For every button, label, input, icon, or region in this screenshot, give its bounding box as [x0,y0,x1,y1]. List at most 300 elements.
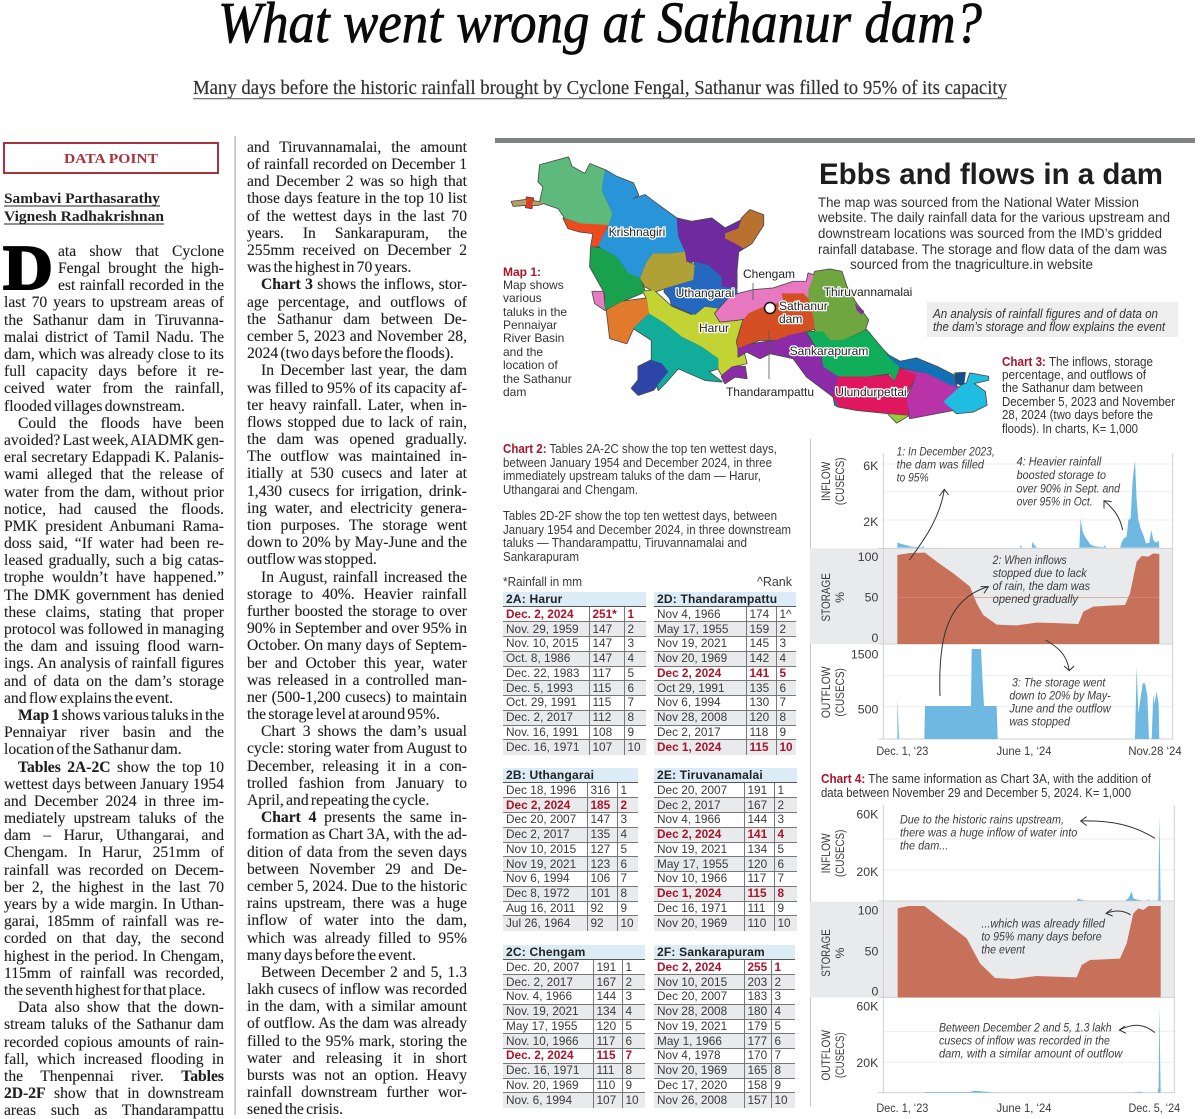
table 2E: Tiruvanamalai: Dec 2, 2024 [657,827,721,841]
chart 3 arrows [909,489,1123,696]
chart 2 caption: taluks — Thandarampattu, Tiruvannamalai and [503,536,747,550]
article column 2: years. In Sankarapuram, the [247,225,467,242]
table 2E: Tiruvanamalai: Nov 19, 2021 [657,842,727,856]
table 2E: Tiruvanamalai: 134 [748,842,767,856]
table 2A: Harur: 147 [592,636,612,650]
article column 2: the dam was opened gradually. [247,431,467,448]
table 2A: Harur [503,592,646,755]
chart 3 axis labels: 2K [863,515,879,529]
article column 2: October. On many days of Septem- [247,637,467,654]
chart 4 axis labels: (CUSECS) [833,1032,847,1078]
chart 3 caption: the Sathanur dam between [1002,381,1143,395]
table 2C: Chengam: 134 [596,1004,616,1018]
table 2F: Sankarapuram: 255 [748,960,767,974]
map 1 caption: Pennaiyar [503,318,557,332]
table 2E: Tiruvanamalai: May 17, 1955 [657,857,728,871]
authors byline: Sambavi Parthasarathy [4,191,161,207]
table 2F: Sankarapuram: Nov 20, 1969 [657,1063,727,1077]
table 2D: Thandarampattu: 135 [750,681,769,695]
table 2A: Harur: Dec. 22, 1983 [506,666,579,680]
panel top rule [495,138,1195,143]
article column 2: and Tiruvannamalai, the amount [247,139,467,156]
chart 2 caption: Uthangarai and Chengam. [503,483,638,497]
chart 4 axis labels: INFLOW [819,833,833,873]
table 2A: Harur: Dec. 2, 2017 [506,710,573,724]
article column 2: ber and October this year, water [247,655,467,672]
table 2E: Tiruvanamalai: 167 [748,798,767,812]
table 2C: Chengam: 2 [626,975,632,989]
chart 4 axis labels [819,807,1180,1115]
chart 3 caption: 28, 2024 (two days before the [1002,408,1153,422]
article column 2: trolled fashion from January to [247,775,467,792]
table 2E: Tiruvanamalai: 2 [778,798,784,812]
table 2D: Thandarampattu: 141 [750,666,769,680]
article column 2: Chart 3 shows the inflows, stor- [261,276,467,293]
table 2E: Tiruvanamalai: 8 [778,886,784,900]
table 2E: Tiruvanamalai: Nov 4, 1966 [657,812,721,826]
table 2B: Uthangarai: 4 [620,827,627,841]
article column 1: highest in the period. In Chengam, [4,948,224,965]
table 2D: Thandarampattu: 130 [750,696,769,709]
map labels: Chengam [743,267,795,281]
chart 4 annotations: the event [981,944,1026,957]
table 2A: Harur: Oct. 8, 1986 [506,651,570,665]
article column 1: Pennaiyar river basin and the [4,724,224,741]
article column 1: wettest days between January 1954 [4,776,224,793]
chart 4 annotations: the dam... [900,839,948,852]
table 2D: Thandarampattu: 8 [780,710,786,724]
data point label [4,143,218,173]
table 2C: Chengam: Nov. 6, 1994 [506,1093,572,1107]
table 2B: Uthangarai: 1 [620,783,627,797]
table 2F: Sankarapuram: 183 [748,990,767,1003]
table 2E: Tiruvanamalai: Dec 2, 2017 [657,798,721,812]
article column 2: formation as Chart 3A, with the ad- [247,826,467,843]
table 2B: Uthangarai: 3 [620,812,627,826]
chart 3 annotations: boosted storage to [1017,469,1106,482]
chart 4 axis labels: Dec. 1, ‘23 [876,1101,928,1115]
table 2F: Sankarapuram: Dec 2, 2024 [657,960,721,974]
callout: analysis summary: the dam’s storage and flow explains the event [933,320,1165,334]
table 2C: Chengam: 107 [596,1093,616,1107]
intro text [817,195,1170,272]
chart 2 caption: ^Rank [757,575,793,589]
table 2C: Chengam: 120 [596,1019,616,1033]
map 1 caption: taluks in the [503,305,567,319]
table 2F: Sankarapuram: Dec 20, 2007 [657,990,727,1003]
article column 2: April, and repeating the cycle. [247,792,429,809]
article column 1: doss said, “If water had been re- [4,535,224,552]
article column 1: years by a wide margin. In Uthan- [4,896,224,913]
table 2F: Sankarapuram: 10 [774,1093,788,1107]
map: Pennaiyar river basin taluks [512,157,988,423]
table 2F: Sankarapuram: 1 [774,960,781,974]
table 2D: Thandarampattu: 3 [780,636,786,650]
table 2D: Thandarampattu: 10 [780,740,793,754]
article column 1: location of the Sathanur dam. [4,741,182,758]
table 2F: Sankarapuram: Nov 28, 2008 [657,1004,727,1018]
article column 1: ceived water from the rainfall, [4,380,224,397]
chart 3 axis labels: 1500 [851,647,878,661]
table 2E: Tiruvanamalai: 120 [748,857,767,871]
chart 3 axis labels: % [833,592,847,603]
table 2C: Chengam: 8 [626,1063,632,1077]
table 2B: Uthangarai: Nov 10, 2015 [506,842,576,856]
article column 2: 90% in September and over 95% in [247,620,467,637]
chart 4 annotations: Due to the historic rains upstream, [900,813,1064,826]
chart 3 axis labels: Dec. 1, ‘23 [876,744,928,758]
table 2B: Uthangarai: 6 [620,857,627,871]
table 2B: Uthangarai: 147 [590,812,610,826]
article column 1: mediately upstream taluks of the [4,810,224,827]
table 2E: Tiruvanamalai: 1 [778,783,784,797]
table 2C: Chengam: Dec. 2, 2017 [506,975,573,989]
map 1 caption: location of [503,358,558,372]
map leader lines [753,283,769,379]
chart 4 annotations: cusecs of inflow was recorded in the [939,1034,1110,1047]
intro text: website. The daily rainfall data for the various upstream and [817,210,1170,225]
table 2F: Sankarapuram: May 1, 1966 [657,1034,722,1048]
chart 3 axis labels: 6K [863,459,879,473]
article column 1: Data also show that the down- [18,999,224,1016]
article column 1: ber 2, the highest in the last 70 [4,879,224,896]
chart 2 caption: Chart 2: Tables 2A-2C show the top ten wettest days, [503,442,777,456]
chart 3 axis labels: INFLOW [819,461,833,501]
chart 3 annotations: 1: In December 2023, [897,446,995,459]
map 1 caption: Map shows [503,278,564,292]
article column 2: cember 5, 2024. Due to the historic [247,878,467,895]
table 2E: Tiruvanamalai: Dec 16, 1971 [657,901,727,915]
table 2C: Chengam: Nov. 19, 2021 [506,1004,579,1018]
article column 1: malai district of Tamil Nadu. The [4,329,224,346]
article column 2: rainfall downstream further wor- [247,1084,467,1101]
article column 2: ter heavy rainfall. Later, when in- [247,397,467,414]
article column 2: ing water, and electricity genera- [247,500,467,517]
chart 3 caption [1002,355,1175,436]
article column 1: garai, 185mm of rainfall was re- [4,913,224,930]
map labels: Krishnagiri [609,225,665,239]
column rule [234,136,236,1115]
chart 4 annotations [900,813,1124,1060]
table 2D: Thandarampattu: Dec 2, 2017 [657,725,721,739]
chart 3 axis labels: STORAGE [819,573,833,621]
chart 3: inflow, storage, outflow [810,439,1182,772]
article column 1: last 70 years to upstream areas of [4,294,224,311]
chart 3 caption: floods). In charts, K= 1,000 [1002,422,1138,436]
article column 2: In December last year, the dam [261,362,467,379]
icon: Sathanur dam marker [764,302,776,314]
chart 4 axis labels: 60K [856,807,879,821]
table 2A: Harur: Dec. 16, 1971 [506,740,579,754]
map labels: Harur [699,321,729,335]
table 2C: Chengam: May 17, 1955 [506,1019,577,1033]
chart 3 annotations: of rain, the dam was [993,580,1090,593]
table 2F: Sankarapuram: 9 [774,1078,781,1092]
article column 1: PMK president Anbumani Rama- [4,518,224,535]
article column 1: and flow explains the event. [4,690,173,707]
article column 1: Chengam. In Harur, 251mm of [4,844,224,861]
map 1 caption: various [503,291,542,305]
table 2D: Thandarampattu: 4 [780,651,786,665]
table 2D: Thandarampattu: Nov 19, 2021 [657,636,727,650]
authors byline [4,191,164,225]
table 2F: Sankarapuram: Nov 4, 1978 [657,1048,721,1062]
table 2A: Harur: Nov. 10, 2015 [506,636,579,650]
article column 1: rainfall was recorded on Decem- [4,862,224,879]
chart 3 axis labels [819,457,1182,758]
table 2F: Sankarapuram: 177 [748,1034,767,1048]
table 2B: Uthangarai: 8 [620,886,627,900]
table 2A: Harur: 6 [628,681,634,695]
table 2B: Uthangarai: 9 [620,901,627,915]
table 2D: Thandarampattu: Nov 6, 1994 [657,696,721,709]
chart 3 annotations: 2: When inflows [992,554,1067,567]
table 2B: Uthangarai: Dec 8, 1972 [506,886,570,900]
article column 1: Fengal brought the high- [58,260,224,277]
article column 1: wami alleged that the release of [4,466,224,483]
chart 4 axis labels: 50 [865,944,878,958]
table 2F: Sankarapuram: Dec 17, 2020 [657,1078,727,1092]
article column 1: ings. An analysis of rainfall figures [4,655,224,672]
table 2A: Harur: 147 [592,622,612,636]
chart 3 annotations [897,446,1120,729]
chart 4 arrows [1081,817,1155,1033]
chart 3 annotations: over 95% in Oct. [1017,495,1093,508]
article column 2: of the wettest days in the last 70 [247,208,467,225]
article column 1: avoided? Last week, AIADMK gen- [4,432,224,449]
table 2C: Chengam: 4 [626,1004,632,1018]
table 2A: Harur: 2 [628,622,634,636]
table 2D: Thandarampattu: 174 [750,607,769,621]
table 2E: Tiruvanamalai: 7 [778,872,784,885]
chart 3 axis labels: (CUSECS) [833,457,847,505]
chart 3 axis labels: June 1, ‘24 [996,744,1052,758]
table 2F: Sankarapuram: 2F: Sankarapuram [657,945,765,959]
table 2B: Uthangarai: 185 [590,798,610,812]
table 2B: Uthangarai: 123 [590,857,610,871]
table 2D: Thandarampattu: 9 [780,725,786,739]
table 2D: Thandarampattu: 120 [750,710,769,724]
table 2A: Harur: 9 [628,725,634,739]
article column 1: Tables 2A-2C show the top 10 [18,759,224,776]
chart 3 annotations: opened gradually [993,593,1079,606]
article column 1: the Thenpennai river. Tables [4,1068,224,1085]
table 2C: Chengam: Nov. 4, 1966 [506,990,572,1003]
map labels: Thandarampattu [726,385,814,399]
article column 1: flooded villages downstream. [4,398,185,415]
article column 1: dam – Harur, Uthangarai, and [4,827,224,844]
chart 4 annotations: there was a huge inflow of water into [900,826,1078,839]
subtitle: Many days before the historic rainfall brought by Cyclone Fengal, Sathanur was filled to 95% of its capacity [193,77,1007,99]
article column 1: trophe wouldn’t have happened.” [4,569,224,586]
table 2B: Uthangarai: Aug 16, 2011 [506,901,575,915]
chart 4 axis labels: 20K [856,865,879,879]
article column 2: the storage level at around 95%. [247,706,440,723]
chart 4 caption: Chart 4: The same information as Chart 3A, with the addition of [821,772,1151,786]
table 2A: Harur: 251* [592,607,617,621]
table 2D: Thandarampattu: 118 [750,725,768,739]
table 2D: Thandarampattu: Nov 4, 1966 [657,607,721,621]
article column 2 [246,139,468,1118]
table 2E: Tiruvanamalai: 191 [748,783,767,797]
chart 3 annotations: down to 20% by May- [1009,690,1111,703]
article column 1: est rainfall recorded in the [58,277,224,294]
table 2C: Chengam: 5 [626,1019,632,1033]
table 2D: Thandarampattu [654,592,796,755]
article column 2: filled to the 95% mark, storing the [247,1033,467,1050]
table 2B: Uthangarai: Dec 2, 2024 [506,798,570,812]
chart 4 annotations: Between December 2 and 5, 1.3 lakh [939,1021,1112,1034]
map 1 caption: dam [503,385,526,399]
table 2E: Tiruvanamalai: 110 [748,916,766,930]
panel heading: Ebbs and flows in a dam [819,158,1163,191]
article column 2: December, releasing it in a con- [247,758,467,775]
table 2F: Sankarapuram: 4 [774,1004,781,1018]
chart 3 caption: Chart 3: The inflows, storage [1002,355,1153,369]
table 2D: Thandarampattu: 7 [780,696,786,709]
chart 3 axis labels: 100 [858,550,878,564]
chart 4 axis labels: OUTFLOW [819,1030,833,1081]
article column 2: itially at 530 cusecs and later at [247,465,467,482]
article column 2: inflow of water into the dam, [247,912,467,929]
table 2C: Chengam: 6 [626,1034,632,1048]
chart 2 caption: January 1954 and December 2024, in three downstream [503,523,791,537]
article column 2: Between December 2 and 5, 1.3 [261,964,467,981]
map 1 caption: the Sathanur [503,372,572,386]
table 2B: Uthangarai: 316 [590,783,610,797]
article column 2: of rainfall recorded on December 1 [247,156,467,173]
article column 2: which was already filled to 95% [247,930,467,947]
chart 4 axis labels: June 1, ‘24 [996,1101,1052,1115]
table 2B: Uthangarai: 127 [590,842,610,856]
table 2A: Harur: Oct. 29, 1991 [506,696,577,709]
article column 1: areas such as Thandarampattu [4,1102,224,1119]
article column 2: water and releasing it in short [247,1050,467,1067]
table 2F: Sankarapuram: 8 [774,1063,781,1077]
article column 1: the seventh highest for that place. [4,982,206,999]
table 2E: Tiruvanamalai: Nov 20, 1969 [657,916,727,930]
article column 1: recorded copious amounts of rain- [4,1034,224,1051]
article column 1: stream taluks of the Sathanur dam [4,1016,224,1033]
article column 1: leased gradually, such a big catas- [4,552,224,569]
table 2D: Thandarampattu: Dec 1, 2024 [657,740,721,754]
table 2F: Sankarapuram [654,945,795,1108]
map labels: Uthangarai [676,286,734,300]
article column 2: of outflow. As the dam was already [247,1015,467,1032]
table 2D: Thandarampattu: 1^ [780,607,792,621]
chart 4 axis labels: (CUSECS) [833,830,847,877]
table 2C: Chengam: Dec. 2, 2024 [506,1048,574,1062]
article column 1: Map 1 shows various taluks in the [18,707,224,724]
table 2B: Uthangarai: 5 [620,842,627,856]
chart 3 axis labels: OUTFLOW [819,666,833,718]
table 2C: Chengam: 1 [626,960,632,974]
map 1 caption: River Basin [503,331,564,345]
article column 1: 2D-2F show that in downstream [4,1085,224,1102]
table 2E: Tiruvanamalai: 115 [748,886,767,900]
table 2A: Harur: 115 [592,681,611,695]
table 2B: Uthangarai: 10 [620,916,634,930]
map 1 caption [503,265,572,399]
article column 2: bursts was not an option. Heavy [247,1067,467,1084]
table 2C: Chengam: Dec. 20, 2007 [506,960,579,974]
article column 2: 2024 (two days before the floods). [247,345,454,362]
table 2A: Harur: 107 [592,740,612,754]
article column 1: and of data on the dam’s storage [4,673,224,690]
article column 2: sened the crisis. [247,1101,343,1118]
table 2C: Chengam: Nov. 20, 1969 [506,1078,579,1092]
table 2D: Thandarampattu: Dec 2, 2024 [657,666,721,680]
table 2E: Tiruvanamalai: 117 [748,872,766,885]
chart 2 caption: *Rainfall in mm [503,575,582,589]
article column 2: Chart 4 presents the same in- [261,809,467,826]
table 2A: Harur: 7 [628,696,634,709]
chart 2 caption: between January 1954 and December 2024, in three [503,456,772,470]
article column 2: between November 29 and De- [247,861,467,878]
chart 4 axis labels: STORAGE [819,929,833,977]
chart 3 annotations: the dam was filled [897,459,984,472]
table 2C: Chengam: 117 [596,1034,615,1048]
article column 2: dition of data from the seven days [247,844,467,861]
table 2F: Sankarapuram: 170 [748,1048,767,1062]
article column 1: and December 2024 in three im- [4,793,224,810]
table 2E: Tiruvanamalai: 111 [748,901,765,915]
table 2C: Chengam: 115 [596,1048,616,1062]
table 2A: Harur: 2A: Harur [506,592,562,606]
table 2D: Thandarampattu: May 17, 1955 [657,622,728,636]
article column 1: protocol was followed in managing [4,621,224,638]
table 2B: Uthangarai: 106 [590,872,610,885]
table 2B: Uthangarai: 7 [620,872,627,885]
table 2A: Harur: 147 [592,651,612,665]
table 2A: Harur: 3 [628,636,634,650]
article column 2: storage to 40%. Heavier rainfall [247,586,467,603]
table 2F: Sankarapuram: 165 [748,1063,767,1077]
chart 3 axis labels: 50 [865,591,878,605]
article column 2: was the highest in 70 years. [247,259,411,276]
table 2F: Sankarapuram: 158 [748,1078,767,1092]
table 2B: Uthangarai [503,768,638,931]
chart 4 caption [821,772,1151,800]
chart 4 axis labels: % [833,947,847,958]
table 2B: Uthangarai: 101 [590,886,610,900]
table 2D: Thandarampattu: Nov 20, 1969 [657,651,727,665]
chart 3 axis labels: 500 [858,702,878,716]
table 2F: Sankarapuram: 3 [774,990,781,1003]
article column 2: cember 5, 2023 and November 28, [247,328,467,345]
article column 2: lakh cusecs of inflow was recorded [247,981,467,998]
table 2E: Tiruvanamalai: 10 [778,916,791,930]
article column 2: In August, rainfall increased the [261,569,467,586]
table 2D: Thandarampattu: 2D: Thandarampattu [657,592,777,606]
table 2A: Harur: 4 [628,651,634,665]
table 2E: Tiruvanamalai: 9 [778,901,784,915]
chart 3 axis labels: 0 [871,631,878,645]
table 2A: Harur: 115 [592,696,611,709]
table 2A: Harur: 117 [592,666,611,680]
table 2D: Thandarampattu: 142 [750,651,769,665]
table 2D: Thandarampattu: Oct 29, 1991 [657,681,725,695]
table 2C: Chengam: 2C: Chengam [506,945,586,959]
chart 4 annotations: ...which was already filled [981,918,1105,931]
chart 2 caption: Sankarapuram [503,550,579,564]
chart 3 axis labels: Nov.28 ‘24 [1128,744,1182,758]
table 2E: Tiruvanamalai: 141 [748,827,767,841]
table 2A: Harur: 8 [628,710,634,724]
chart 2 caption: Tables 2D-2F show the top ten wettest days, between [503,509,777,523]
table 2B: Uthangarai: Dec 20, 2007 [506,812,576,826]
table 2E: Tiruvanamalai: Dec 20, 2007 [657,783,727,797]
